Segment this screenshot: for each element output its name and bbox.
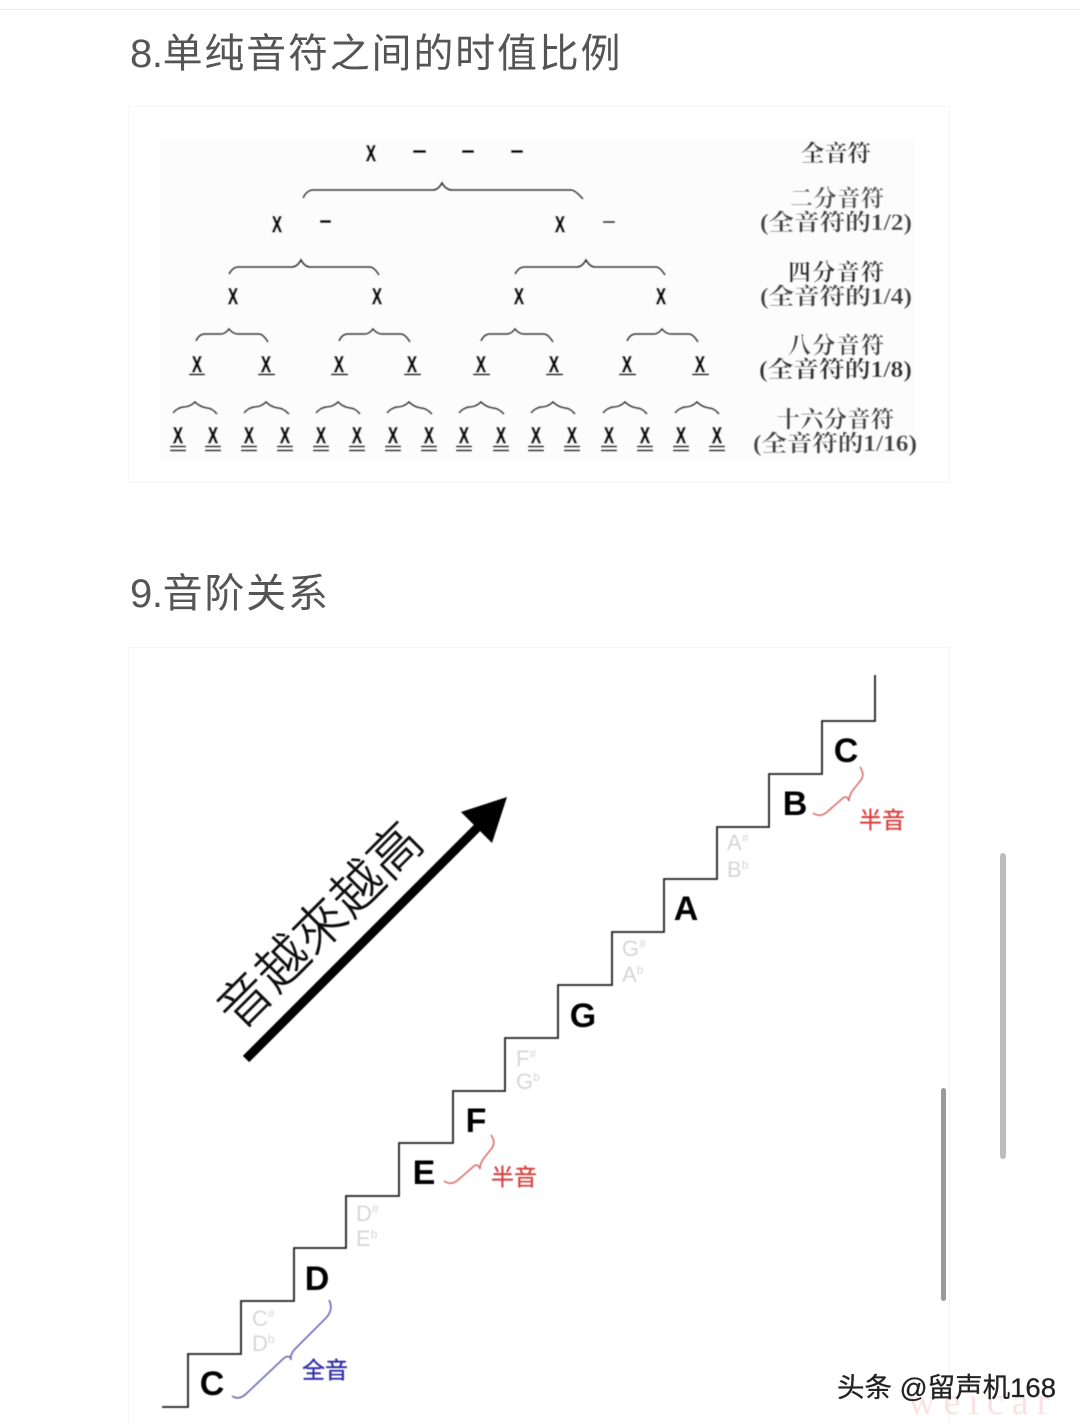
row: eighth notes: X [261, 352, 271, 377]
natural note letters: E [413, 1154, 435, 1192]
accidental note letters: G [516, 1069, 533, 1094]
row: whole note [366, 141, 523, 166]
row: quarter notes: X [656, 284, 666, 309]
accidental note letters [252, 830, 749, 1356]
accidental note letters: # [639, 937, 646, 951]
row: sixteenth notes: X [352, 423, 362, 448]
whole tone label: 全音 [302, 1357, 348, 1383]
semitone label E-F: 半音 [491, 1164, 537, 1190]
row: eighth notes: X [549, 352, 559, 377]
accidental note letters: # [529, 1047, 536, 1061]
row: eighth notes: X [695, 352, 705, 377]
semitone brace E-F [444, 1135, 494, 1183]
accidental note letters: A [727, 830, 742, 855]
row: sixteenth notes: X [316, 423, 326, 448]
row: quarter notes: X [372, 284, 382, 309]
semitone label B-C: 半音 [859, 807, 905, 833]
note name labels: 四分音符 [788, 260, 884, 285]
accidental note letters: b [637, 963, 644, 977]
row: sixteenth notes: X [531, 423, 541, 448]
row: sixteenth notes: X [640, 423, 650, 448]
row: eighth notes: X [407, 352, 417, 377]
chart: scale staircase [162, 675, 905, 1407]
row: sixteenth notes: X [244, 423, 254, 448]
row: half notes [272, 212, 615, 237]
row: whole note: X [366, 141, 376, 166]
accidental note letters: F [516, 1046, 529, 1071]
accidental note letters: b [533, 1070, 540, 1084]
row: sixteenth notes: X [676, 423, 686, 448]
note name labels: (全音符的1/16) [753, 431, 917, 456]
natural note letters: C [200, 1365, 224, 1403]
row: sixteenth notes: X [567, 423, 577, 448]
heading: section 8: 8.单纯音符之间的时值比例 [130, 32, 622, 76]
panel: scale frame [128, 647, 950, 1426]
natural note letters: F [466, 1102, 486, 1140]
semitone brace B-C [813, 767, 863, 815]
row: quarter notes: X [514, 284, 524, 309]
natural note letters [200, 732, 858, 1403]
note name labels: (全音符的1/4) [760, 284, 912, 309]
chart: note value tree [160, 138, 917, 460]
accidental note letters: E [356, 1226, 371, 1251]
row: sixteenth notes: X [712, 423, 722, 448]
accidental note letters: A [622, 962, 637, 987]
source credit: 头条 @留声机168 [837, 1373, 1056, 1403]
staircase line [162, 675, 875, 1407]
arrow: pitch rises [246, 797, 507, 1059]
row: eighth notes: X [334, 352, 344, 377]
row: half notes: X [555, 212, 565, 237]
scrollbar right [1000, 853, 1006, 1159]
note name labels: (全音符的1/2) [760, 210, 912, 235]
whole tone brace [232, 1300, 331, 1398]
faint watermark: weicar [908, 1381, 1057, 1423]
panel: note value frame [128, 106, 950, 483]
accidental note letters: # [268, 1307, 275, 1321]
accidental note letters: # [742, 831, 749, 845]
note name labels: (全音符的1/8) [759, 357, 912, 382]
natural note letters: D [305, 1260, 329, 1298]
row: eighth notes [189, 352, 709, 377]
accidental note letters: b [268, 1332, 275, 1346]
row: eighth notes: X [476, 352, 486, 377]
row: sixteenth notes: X [496, 423, 506, 448]
row: sixteenth notes: X [424, 423, 434, 448]
natural note letters: A [674, 890, 698, 928]
accidental note letters: b [371, 1227, 378, 1241]
row: sixteenth notes: X [388, 423, 398, 448]
row: sixteenth notes: X [280, 423, 290, 448]
natural note letters: G [570, 997, 596, 1035]
top divider line [0, 9, 1080, 10]
row: sixteenth notes: X [173, 423, 183, 448]
row: sixteenth notes [170, 423, 725, 450]
accidental note letters: D [252, 1331, 268, 1356]
brackets grouping notes [173, 183, 719, 414]
accidental note letters: C [252, 1306, 268, 1331]
accidental note letters: G [622, 936, 639, 961]
natural note letters: B [783, 785, 807, 823]
scrollbar left [941, 1088, 946, 1301]
heading: section 9: 9.音阶关系 [130, 572, 330, 616]
accidental note letters: B [727, 857, 742, 882]
note name labels: 八分音符 [788, 333, 884, 358]
row: sixteenth notes: X [604, 423, 614, 448]
accidental note letters: # [372, 1202, 379, 1216]
rotated label: 音越來越高 [207, 812, 435, 1040]
row: quarter notes [228, 284, 666, 309]
note name labels: 全音符 [801, 141, 871, 166]
note name labels: 十六分音符 [777, 407, 894, 432]
natural note letters: C [834, 732, 858, 770]
note name labels: 二分音符 [790, 186, 884, 211]
row: sixteenth notes: X [459, 423, 469, 448]
accidental note letters: b [742, 858, 749, 872]
accidental note letters: D [356, 1201, 372, 1226]
row: eighth notes: X [192, 352, 202, 377]
row: sixteenth notes: X [208, 423, 218, 448]
row: half notes: X [272, 212, 282, 237]
row: eighth notes: X [622, 352, 632, 377]
row: quarter notes: X [228, 284, 238, 309]
note name labels [753, 141, 917, 456]
